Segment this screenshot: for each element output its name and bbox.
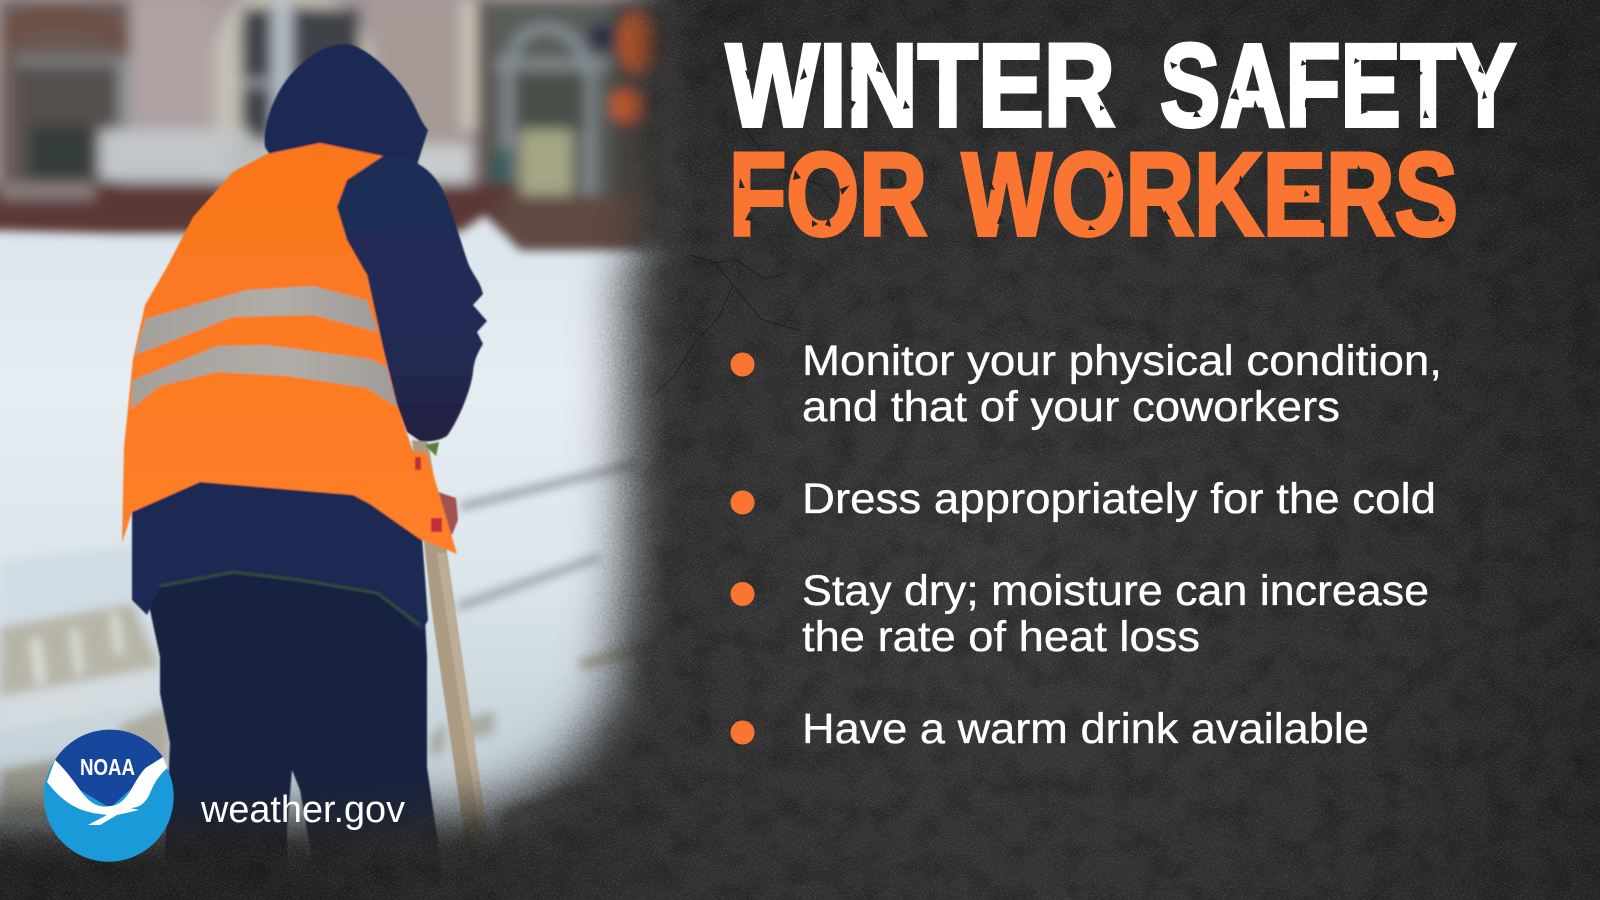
bullet 3: the rate of heat loss [802,613,1200,661]
title line 2: For Workers: WORKERS [962,129,1458,261]
shovel handle [411,439,488,841]
bullet 1 [730,337,1442,431]
icon: NOAA logo: NOAA [80,754,135,780]
title line 2: For Workers: FOR [729,129,927,261]
glove [438,492,458,535]
trousers [149,574,438,858]
bullet 3 [730,567,1429,661]
panel: winter worker photo [0,0,700,900]
sleeve [337,156,487,441]
title [726,20,1516,261]
website label: weather.gov [200,789,405,831]
bullet 2: Dress appropriately for the cold [802,475,1436,523]
icon: NOAA logo [44,730,174,862]
bullet 4: Have a warm drink available [802,705,1369,753]
bullet 3: Stay dry; moisture can increase [802,567,1429,615]
title line 2: For Workers [729,129,1458,261]
bullet 1: and that of your coworkers [802,383,1340,431]
hood [265,44,428,165]
reflective stripes [135,286,378,355]
bullet 1: Monitor your physical condition, [802,337,1442,385]
title line 1: Winter Safety: WINTER [726,20,1115,152]
background building [0,0,700,255]
jacket lower [132,470,428,632]
snow ground [0,215,700,900]
bullet list [730,337,1442,753]
safety vest [122,143,457,554]
worker [122,44,495,900]
title line 1: Winter Safety [726,20,1516,152]
